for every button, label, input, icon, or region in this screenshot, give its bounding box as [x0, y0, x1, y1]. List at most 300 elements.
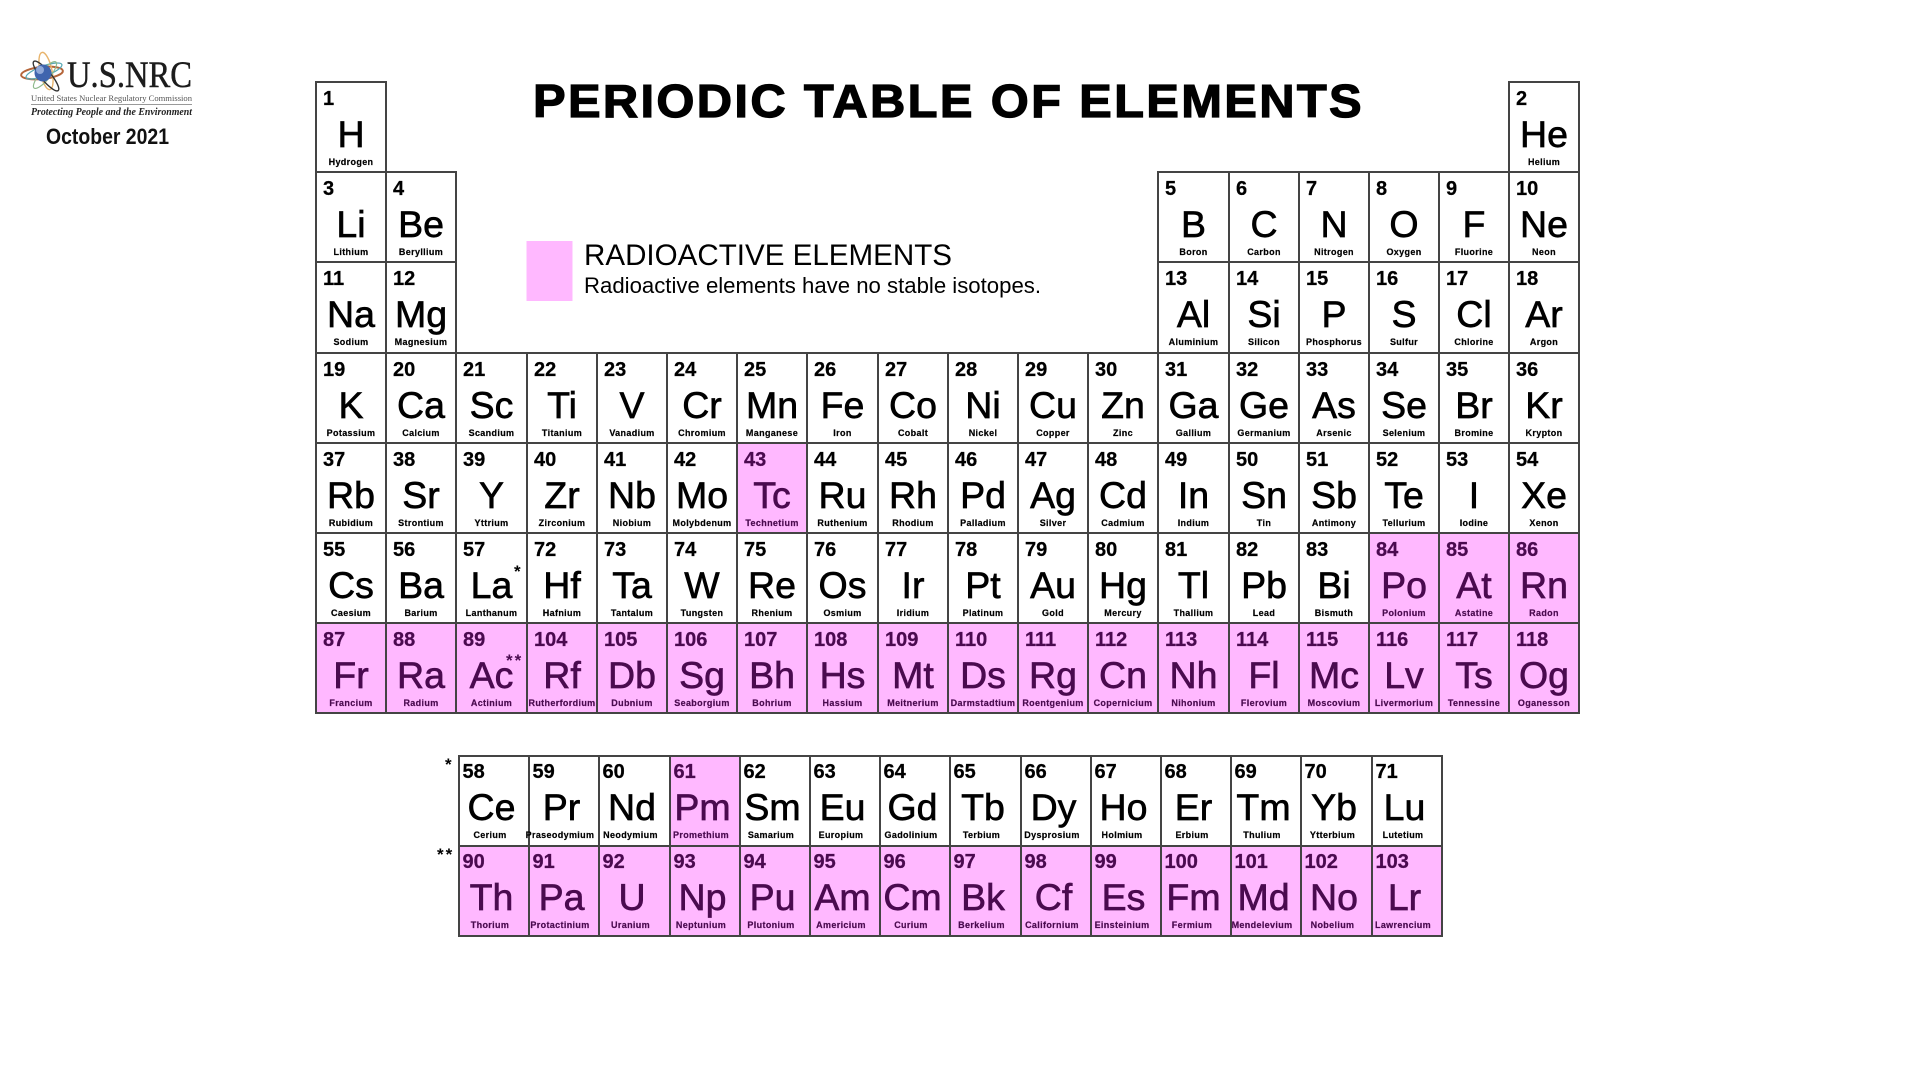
element: Ac: Ac [470, 654, 513, 696]
element: Zr: 40 [534, 449, 556, 471]
element: Au [1017, 532, 1089, 624]
element: Se: Se [1381, 384, 1427, 426]
element: Cl: Cl [1456, 293, 1492, 335]
element: Np [669, 845, 741, 937]
element: Hs: Hs [820, 654, 865, 696]
element: Ag [1017, 442, 1089, 534]
element: Bi: Bismuth [1315, 608, 1353, 618]
element: O: Oxygen [1386, 246, 1422, 256]
element: Os: Osmium [823, 608, 862, 618]
element: Db: Db [608, 654, 656, 696]
element: Og: 118 [1516, 629, 1548, 651]
element: In: In [1178, 474, 1209, 516]
element: Hs: Hassium [823, 698, 862, 708]
element: Sb [1298, 442, 1370, 534]
element: I: I [1469, 474, 1479, 516]
element: He: He [1520, 113, 1568, 155]
element: Mn: Mn [746, 384, 798, 426]
element: Nd: Neodymium [603, 830, 658, 840]
element: Ru: 44 [814, 449, 836, 471]
element: Ta: 73 [604, 539, 626, 561]
element: Rf: Rutherfordium [528, 698, 596, 708]
element: Sc: Scandium [469, 428, 514, 438]
element: Li: Li [336, 203, 366, 245]
element: Ir: 77 [885, 539, 907, 561]
element: Gd: Gadolinium [884, 830, 938, 840]
element: Cu: Cu [1029, 384, 1077, 426]
element: C: C [1250, 203, 1278, 245]
element: Pa [528, 845, 600, 937]
element: Ne: Ne [1520, 203, 1568, 245]
element: P: P [1321, 293, 1346, 335]
element: Dy: Dysprosium [1024, 830, 1080, 840]
element: U: U [618, 876, 646, 918]
element: Pb [1228, 532, 1300, 624]
element: Re: Rhenium [752, 608, 792, 618]
element: Tl: Tl [1178, 564, 1209, 606]
element: Bk [949, 845, 1022, 937]
element: Bi: 83 [1306, 539, 1328, 561]
element: At [1438, 532, 1510, 624]
element: Hs: 108 [814, 629, 847, 651]
element: Pr: Praseodymium [526, 830, 594, 840]
element: Lu: Lu [1384, 786, 1425, 828]
element: F: F [1463, 203, 1485, 245]
element: Dy: Dy [1031, 786, 1076, 828]
element: Sc [455, 352, 528, 444]
element: Bh [736, 622, 808, 714]
element: Lr [1371, 845, 1443, 937]
element: Ta [596, 532, 668, 624]
element: In [1157, 442, 1230, 534]
element: I: 53 [1446, 449, 1468, 471]
element: Pt: 78 [955, 539, 977, 561]
element: Os [806, 532, 879, 624]
element: Cu [1017, 352, 1089, 444]
element: As: Arsenic [1316, 428, 1352, 438]
element: Rh [877, 442, 949, 534]
element: Cr: Cr [682, 384, 722, 426]
element: Be: Beryllium [399, 246, 443, 256]
element: Sm: 62 [744, 761, 766, 783]
element: Fl: 114 [1236, 629, 1268, 651]
element: Md: 101 [1234, 851, 1268, 873]
element: Lv: Livermorium [1375, 698, 1433, 708]
element: Lu: Lutetium [1383, 830, 1423, 840]
element: Ba: Barium [404, 608, 438, 618]
element: Yb [1300, 755, 1373, 847]
element: Og: Oganesson [1518, 698, 1570, 708]
element: Zn: Zinc [1113, 428, 1133, 438]
element: Mo: Mo [676, 474, 728, 516]
element: At: At [1456, 564, 1492, 606]
element: Au: 79 [1025, 539, 1047, 561]
element: Cd: Cd [1099, 474, 1147, 516]
element: Rb: 37 [323, 449, 345, 471]
element: Tc: Tc [753, 474, 791, 516]
element: Bi [1298, 532, 1370, 624]
element: Og: Og [1519, 654, 1569, 696]
element: Hs [806, 622, 879, 714]
element: V: V [619, 384, 644, 426]
element: Xe: Xe [1521, 474, 1567, 516]
element: V: Vanadium [609, 428, 655, 438]
element: Po [1368, 532, 1440, 624]
element: Rb [315, 442, 387, 534]
element: Fl: Fl [1248, 654, 1280, 696]
element: Bh: Bh [749, 654, 795, 696]
element: Y [455, 442, 528, 534]
element: Ga [1157, 352, 1230, 444]
element: Pt: Platinum [963, 608, 1003, 618]
element: Gd: 64 [884, 761, 906, 783]
element: Lu [1371, 755, 1443, 847]
element: Ge: Germanium [1237, 428, 1291, 438]
element: Br: Br [1455, 384, 1493, 426]
logo tagline: Protecting People and the Environment [31, 107, 193, 118]
element: Kr: Krypton [1526, 428, 1562, 438]
element: Nh: Nihonium [1171, 698, 1216, 708]
element: Xe: 54 [1516, 449, 1538, 471]
element: Yb: Yb [1311, 786, 1357, 828]
element: Te: 52 [1376, 449, 1398, 471]
element: At: Astatine [1455, 608, 1493, 618]
element: Ge: 32 [1236, 359, 1258, 381]
element: Sg: 106 [674, 629, 707, 651]
element: Pm: Pm [674, 786, 731, 828]
element: Ds: Darmstadtium [951, 698, 1015, 708]
element: Lv: 116 [1376, 629, 1408, 651]
element: Rh: Rhodium [892, 518, 934, 528]
lanthanide and actinide table [458, 755, 1443, 937]
element: Ds: 110 [955, 629, 987, 651]
element: Fm [1160, 845, 1232, 937]
element: Be: 4 [393, 178, 404, 200]
element: Cm [879, 845, 951, 937]
element: Pb: 82 [1236, 539, 1258, 561]
element: Tm [1230, 755, 1302, 847]
element: Ca: Ca [397, 384, 445, 426]
element: Tc: 43 [744, 449, 766, 471]
element: Br: Bromine [1455, 428, 1493, 438]
element: Zn: Zn [1101, 384, 1145, 426]
element: Lr: 103 [1376, 851, 1409, 873]
element: N: 7 [1306, 178, 1317, 200]
element: Lr: Lawrencium [1375, 920, 1431, 930]
element: Fe: Iron [833, 428, 852, 438]
element: Th: Th [470, 876, 513, 918]
element: Fm: 100 [1164, 851, 1198, 873]
element: Nd [598, 755, 671, 847]
element: Dy [1020, 755, 1092, 847]
legend description: Radioactive elements have no stable isotopes. [584, 273, 1041, 298]
element: Rf [526, 622, 598, 714]
element: Be: Be [398, 203, 444, 245]
element: Zr: Zirconium [539, 518, 585, 528]
element: Fr: Francium [329, 698, 373, 708]
element: Es: Einsteinium [1095, 920, 1149, 930]
element: Lv: Lv [1384, 654, 1424, 696]
element: Eu [809, 755, 881, 847]
element: Y: 39 [463, 449, 485, 471]
element: Rf: Rf [543, 654, 581, 696]
element: Co: 27 [885, 359, 907, 381]
element: Mc [1298, 622, 1370, 714]
element: W: W [684, 564, 720, 606]
element: Si: Silicon [1248, 336, 1280, 346]
element: Hg: 80 [1095, 539, 1117, 561]
element: Ir: Iridium [897, 608, 929, 618]
element: As [1298, 352, 1370, 444]
element: Fr [315, 622, 387, 714]
element: Ge: Ge [1239, 384, 1289, 426]
element: Bk: 97 [954, 851, 976, 873]
element: Ra: 88 [393, 629, 415, 651]
element: Sg: Sg [679, 654, 725, 696]
element: As: As [1312, 384, 1356, 426]
element: Zn: 30 [1095, 359, 1117, 381]
element: Mo [666, 442, 738, 534]
element: Cs: Cs [328, 564, 374, 606]
element: Gd: Gd [887, 786, 938, 828]
element: Xe [1508, 442, 1580, 534]
element: Eu: 63 [814, 761, 836, 783]
element: Bk: Bk [961, 876, 1005, 918]
element: Tb: Terbium [963, 830, 1000, 840]
element: Ac: Actinium [471, 698, 512, 708]
element: Cr [666, 352, 738, 444]
element: Rn: Rn [1520, 564, 1568, 606]
element: Am: Am [814, 876, 871, 918]
element: La: La [471, 564, 512, 606]
element: Ac [455, 622, 528, 714]
element: Fe: 26 [814, 359, 836, 381]
element: La: 57 [463, 539, 485, 561]
element: Pa: Pa [539, 876, 584, 918]
element: Ga: 31 [1165, 359, 1187, 381]
element: In: Indium [1178, 518, 1209, 528]
element: Na [315, 261, 387, 354]
element: Ir: Ir [902, 564, 924, 606]
element: N [1298, 171, 1370, 263]
element: Ru [806, 442, 879, 534]
element: O: 8 [1376, 178, 1387, 200]
element: Pb: Lead [1253, 608, 1275, 618]
element: W: 74 [674, 539, 696, 561]
legend: radioactive elements [526, 239, 1041, 301]
element: Pu [739, 845, 811, 937]
element: Cd: Cadmium [1101, 518, 1145, 528]
element: Am: Americium [816, 920, 866, 930]
element: Ce: 58 [462, 761, 485, 783]
element: W: Tungsten [681, 608, 723, 618]
element: Ce: Ce [468, 786, 515, 828]
element: Nd: 60 [602, 761, 625, 783]
element: Pd [947, 442, 1019, 534]
element: Ra: Ra [397, 654, 445, 696]
element: Tc [736, 442, 808, 534]
element: Sm: Samarium [748, 830, 794, 840]
element: Mc: Moscovium [1308, 698, 1360, 708]
element: Mn: Manganese [746, 428, 798, 438]
element: He: Helium [1528, 156, 1560, 166]
element: Po: Polonium [1382, 608, 1426, 618]
element: Fe: Fe [821, 384, 864, 426]
element: Ta: Tantalum [611, 608, 653, 618]
actinium double asterisk: ** [506, 651, 523, 670]
element: Pa: 91 [532, 851, 555, 873]
element: Os: 76 [814, 539, 836, 561]
element: Ts [1438, 622, 1510, 714]
element: Xe: Xenon [1529, 518, 1559, 528]
element: Lu: 71 [1376, 761, 1398, 783]
element: Mt: 109 [885, 629, 918, 651]
element: Mn: 25 [744, 359, 766, 381]
element: S: S [1391, 293, 1416, 335]
element: Pt: Pt [965, 564, 1001, 606]
element: Gd [879, 755, 951, 847]
element: Cl: 17 [1446, 268, 1468, 290]
element: Ge [1228, 352, 1300, 444]
element: Te: Te [1384, 474, 1424, 516]
element: Si [1228, 261, 1300, 354]
element: In: 49 [1165, 449, 1187, 471]
element: Ra: Radium [403, 698, 439, 708]
element: C: 6 [1236, 178, 1247, 200]
element: Mg: 12 [393, 268, 415, 290]
element: Nb: Nb [608, 474, 656, 516]
element: Rn: 86 [1516, 539, 1538, 561]
element: Be [385, 171, 457, 263]
element: Cu: Copper [1036, 428, 1070, 438]
element: Hf: 72 [534, 539, 556, 561]
element: Tb: Tb [961, 786, 1005, 828]
element: Hf: Hafnium [543, 608, 581, 618]
element: Db [596, 622, 668, 714]
element: Fl [1228, 622, 1300, 714]
element: H: 1 [323, 88, 334, 110]
element: Ar [1508, 261, 1580, 354]
element: Mn [736, 352, 808, 444]
element: Pd: 46 [955, 449, 977, 471]
element: Sb: Antimony [1312, 518, 1356, 528]
element: Se: 34 [1376, 359, 1398, 381]
element: W [666, 532, 738, 624]
element: Sr: 38 [393, 449, 415, 471]
element: B: B [1181, 203, 1206, 245]
element: Hf [526, 532, 598, 624]
element: Ni: 28 [955, 359, 977, 381]
element: Kr: 36 [1516, 359, 1538, 381]
lanthanum asterisk: * [514, 562, 521, 581]
element: Ar: 18 [1516, 268, 1538, 290]
element: Nd: Nd [608, 786, 656, 828]
element: V [596, 352, 668, 444]
element: Ba: 56 [393, 539, 415, 561]
element: Yb: Ytterbium [1310, 830, 1355, 840]
element: Po: Po [1381, 564, 1427, 606]
element: Rg [1017, 622, 1089, 714]
element: Ds: Ds [960, 654, 1006, 696]
element: Mc: Mc [1309, 654, 1359, 696]
element: Cs [315, 532, 387, 624]
element: Co: Co [889, 384, 937, 426]
element: Nh: Nh [1170, 654, 1217, 696]
element: Eu: Europium [819, 830, 863, 840]
element: Cn: Copernicium [1094, 698, 1152, 708]
element: Tl: 81 [1165, 539, 1187, 561]
element: C [1228, 171, 1300, 263]
element: Fl: Flerovium [1241, 698, 1287, 708]
element: Pa: Protactinium [530, 920, 590, 930]
element: Re: 75 [744, 539, 766, 561]
element: H: H [337, 113, 365, 155]
element: Am [809, 845, 881, 937]
element: P: 15 [1306, 268, 1328, 290]
element: S: 16 [1376, 268, 1398, 290]
element: Kr [1508, 352, 1580, 444]
element: Pt [947, 532, 1019, 624]
element: Ac: 89 [463, 629, 485, 651]
element: Y: Y [479, 474, 504, 516]
element: Cn [1087, 622, 1159, 714]
element: Ru: Ru [819, 474, 866, 516]
element: Re [736, 532, 808, 624]
element: N: N [1320, 203, 1348, 245]
element: S: Sulfur [1390, 336, 1418, 346]
element: Br [1438, 352, 1510, 444]
element: Sc: Sc [470, 384, 513, 426]
element: Cf: Californium [1025, 920, 1079, 930]
element: Nb [596, 442, 668, 534]
element: Ho: 67 [1094, 761, 1117, 783]
element: Ga: Gallium [1176, 428, 1211, 438]
element: Mt: Meitnerium [887, 698, 939, 708]
element: Ho [1090, 755, 1162, 847]
element: Bh: 107 [744, 629, 777, 651]
legend heading: RADIOACTIVE ELEMENTS [584, 239, 952, 272]
element: F: Fluorine [1455, 246, 1493, 256]
element: Ti: 22 [534, 359, 556, 381]
element: Na: Na [327, 293, 375, 335]
element: Tm: 69 [1234, 761, 1257, 783]
element: Kr: Kr [1525, 384, 1563, 426]
element: Co [877, 352, 949, 444]
element: Cu: 29 [1025, 359, 1047, 381]
element: Yb: 70 [1304, 761, 1327, 783]
element: Mt: Mt [892, 654, 934, 696]
element: U: Uranium [611, 920, 650, 930]
element: Ba [385, 532, 457, 624]
element: Sg [666, 622, 738, 714]
element: Np: Np [679, 876, 726, 918]
element: Ir [877, 532, 949, 624]
element: Ag: Silver [1040, 518, 1066, 528]
element: Ho: Ho [1100, 786, 1147, 828]
element: Na: 11 [323, 268, 344, 290]
element: Cm: 96 [884, 851, 906, 873]
element: Tm: Thulium [1243, 830, 1281, 840]
element: Na: Sodium [333, 336, 369, 346]
logo agency name: United States Nuclear Regulatory Commission [31, 93, 193, 103]
element: Sn: 50 [1236, 449, 1258, 471]
main periodic table [315, 81, 1580, 714]
element: Er: Erbium [1175, 830, 1209, 840]
element: Cs: Caesium [331, 608, 371, 618]
element: S [1368, 261, 1440, 354]
element: Pr [528, 755, 600, 847]
element: Mc: 115 [1306, 629, 1338, 651]
